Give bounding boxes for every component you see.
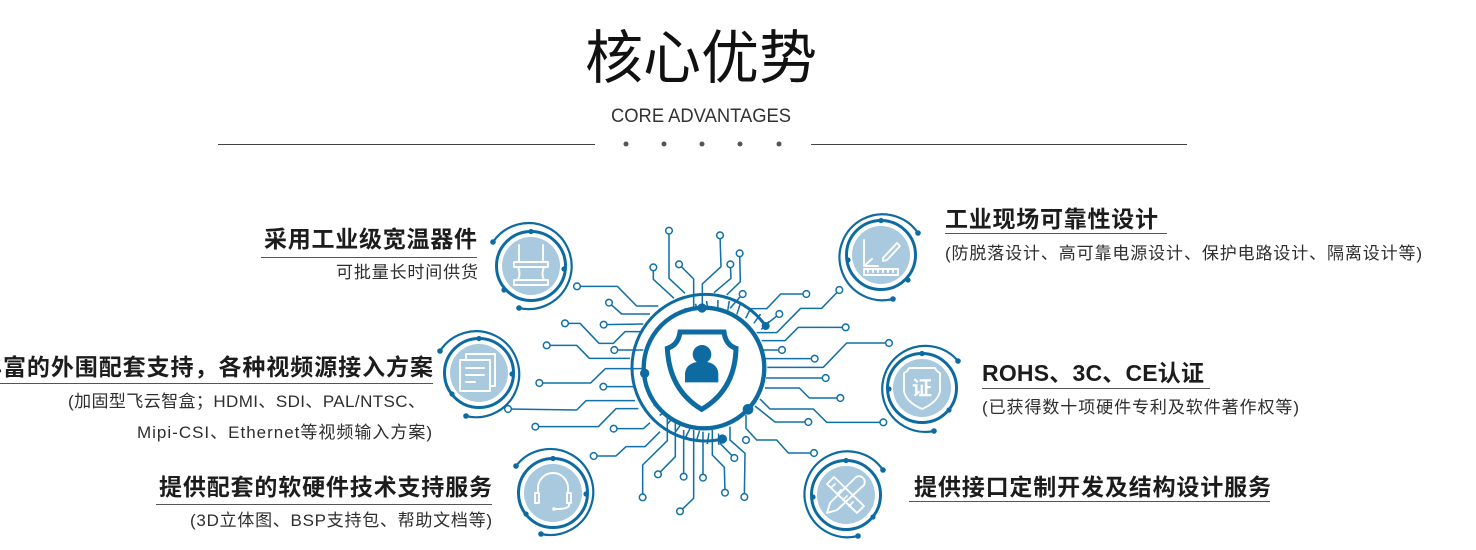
panel: wide-temperature components [261,223,572,311]
heading: 工业现场可靠性设计 [945,206,1158,232]
circuit traces [508,231,889,511]
icon: shield with person [667,332,736,409]
title: 核心优势 [585,11,817,95]
description: (防脱落设计、高可靠电源设计、保护电路设计、隔离设计等) [945,244,1422,263]
description: (已获得数十项硬件专利及软件著作权等) [982,398,1299,417]
central rings [632,294,770,444]
icon: certified shield [882,346,961,434]
circuit end nodes [505,227,892,515]
description line 2: Mipi-CSI、Ethernet等视频输入方案) [137,423,432,442]
heading: 提供配套的软硬件技术支持服务 [159,474,492,500]
heading: 采用工业级宽温器件 [264,226,477,252]
heading: ROHS、3C、CE认证 [982,360,1204,386]
description line 1: (加固型飞云智盒；HDMI、SDI、PAL/NTSC、 [68,392,425,411]
icon: documents [437,331,519,419]
panel: software and hardware support [156,449,593,537]
description: (3D立体图、BSP支持包、帮助文档等) [190,511,492,530]
description: 可批量长时间供货 [336,263,478,282]
central circuit diagram [505,227,892,515]
icon: ruler and pencil [805,451,886,539]
icon: power module [490,223,572,311]
panel: certification [882,346,1299,434]
panel: custom development [805,451,1271,539]
heading: 提供接口定制开发及结构设计服务 [914,474,1271,500]
radial ticks between rings [651,306,766,439]
icon: certified shield: 证 [912,377,932,400]
subtitle: CORE ADVANTAGES [611,106,791,127]
title divider [218,142,1187,146]
panel: industrial reliability [840,206,1422,302]
panel: peripheral support [0,331,519,442]
icon: headset [513,449,593,537]
icon: drafting pen and ruler [840,214,921,302]
